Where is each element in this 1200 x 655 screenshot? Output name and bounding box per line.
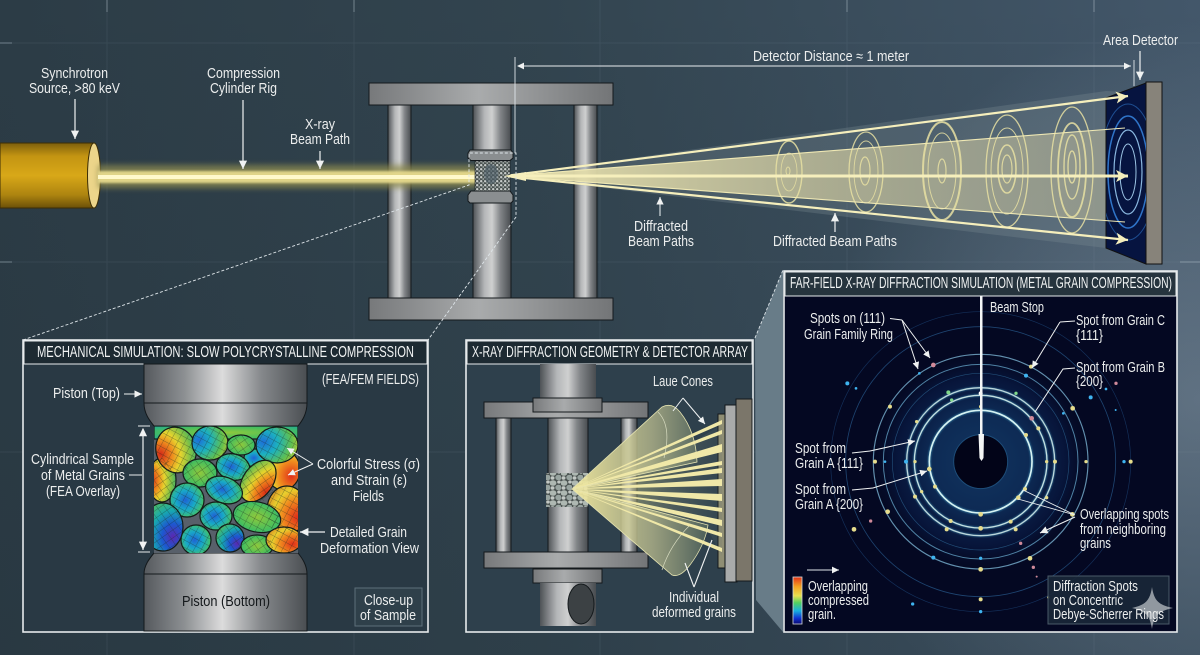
- label: spots on 111 ring: [804, 311, 930, 369]
- heading: mechanical simulation: [24, 341, 427, 364]
- label: stress and strain fields: Fields: [353, 489, 384, 505]
- diffracted rays fan: [572, 420, 722, 552]
- compression rig: [369, 83, 613, 320]
- label: overlapping spots: from neighboring: [1080, 522, 1166, 538]
- diffracted beams and rings: [505, 91, 1128, 250]
- label: individual deformed grains: deformed grains: [652, 605, 736, 621]
- label: synchrotron source: Synchrotron: [41, 66, 108, 82]
- callout: close-up of sample: [355, 588, 422, 626]
- heading: diffraction geometry: [467, 341, 752, 364]
- callout: debye-scherrer rings: Diffraction Spots: [1053, 579, 1138, 595]
- label: x-ray beam path: [290, 117, 350, 169]
- legend: colour bar: grain.: [808, 607, 836, 623]
- label: overlapping spots: [1018, 490, 1169, 552]
- detector array: [718, 399, 752, 582]
- label: diffracted beam paths right: Diffracted Beam Paths: [773, 234, 897, 250]
- diffraction spots: [845, 363, 1133, 613]
- callout: debye-scherrer rings: Debye-Scherrer Rings: [1053, 607, 1164, 623]
- heading: diffraction geometry: X-RAY DIFFRACTION GEOMETRY & DETECTOR ARRAY: [472, 344, 748, 361]
- label: synchrotron source: [29, 66, 120, 139]
- label: laue cones: Laue Cones: [653, 374, 713, 390]
- x-ray beam path: [98, 165, 478, 188]
- callout: debye-scherrer rings: [1048, 576, 1173, 629]
- label: area detector: [1103, 33, 1178, 80]
- label: spot from grain C: {111}: [1076, 328, 1103, 344]
- legend: colour bar: Overlapping: [808, 579, 868, 595]
- label: cylindrical sample: of Metal Grains: [41, 468, 125, 484]
- label: individual deformed grains: [652, 540, 736, 621]
- laue cones: [572, 405, 722, 576]
- callout: debye-scherrer rings: on Concentric: [1053, 593, 1123, 609]
- callout: close-up of sample: Close-up: [364, 593, 413, 609]
- label: compression cylinder rig: Cylinder Rig: [210, 81, 277, 97]
- piston bottom: Piston (Bottom): [182, 594, 270, 610]
- label: cylindrical sample: Cylindrical Sample: [31, 452, 134, 468]
- label: laue cones: [653, 374, 713, 424]
- label: diffracted beam paths left: Beam Paths: [628, 234, 694, 250]
- label: spot from grain B: [1035, 360, 1165, 412]
- area detector: [1100, 82, 1162, 264]
- label: spot from grain B: {200}: [1076, 374, 1103, 390]
- piston bottom: [144, 553, 307, 631]
- diffracted beam rays: [505, 96, 1128, 240]
- label: stress and strain fields: [287, 448, 420, 505]
- label: compression cylinder rig: [207, 66, 280, 169]
- inner diffracted cone edges: [505, 128, 1125, 222]
- label: diffracted beam paths left: [628, 197, 694, 250]
- x-ray source tube: [0, 143, 100, 208]
- label: cylindrical sample: [31, 426, 150, 552]
- label: cylindrical sample: (FEA Overlay): [46, 484, 120, 500]
- label: stress and strain fields: Colorful Stress (σ): [317, 457, 420, 473]
- label: detailed grain deformation: Deformation View: [320, 541, 419, 557]
- label: individual deformed grains: Individual: [669, 590, 719, 606]
- panel: far-field diffraction simulation: [784, 271, 1177, 632]
- label: piston top: Piston (Top): [53, 386, 120, 402]
- callout: close-up of sample: of Sample: [360, 608, 416, 624]
- label: overlapping spots: Overlapping spots: [1080, 507, 1169, 523]
- label: overlapping spots: grains: [1080, 536, 1111, 552]
- label: detailed grain deformation: Detailed Grain: [330, 525, 407, 541]
- small rig: [484, 364, 648, 626]
- heading: mechanical simulation: MECHANICAL SIMULATION: SLOW POLYCRYSTALLINE COMPRESSION: [37, 344, 414, 361]
- label: spots on 111 ring: Spots on (111): [810, 311, 885, 327]
- heading: far-field simulation: [785, 272, 1176, 296]
- label: spot from grain A 111: Grain A {111}: [795, 456, 863, 472]
- label: spot from grain B: Spot from Grain B: [1076, 360, 1165, 376]
- label: synchrotron source: Source, >80 keV: [29, 81, 120, 97]
- label: x-ray beam path: X-ray: [305, 117, 336, 133]
- label: spot from grain A 200: [795, 471, 927, 513]
- label: area detector: Area Detector: [1103, 33, 1178, 49]
- label: spot from grain A 111: Spot from: [795, 441, 846, 457]
- label: spot from grain A 200: Grain A {200}: [795, 497, 863, 513]
- panel: mechanical simulation: [23, 340, 428, 632]
- label: spot from grain C: Spot from Grain C: [1076, 313, 1165, 329]
- panel: x-ray diffraction geometry: [466, 340, 753, 632]
- piston top: [144, 364, 307, 426]
- label: x-ray beam path: Beam Path: [290, 132, 350, 148]
- label: detailed grain deformation: [300, 525, 419, 557]
- label: diffracted beam paths left: Diffracted: [634, 219, 688, 235]
- label: diffracted beam paths right: [773, 213, 897, 250]
- dashed zoom guide lines: [23, 153, 783, 340]
- chart: FEA grain field: [154, 426, 298, 553]
- label: spots on 111 ring: Grain Family Ring: [804, 327, 893, 343]
- zoom wedge to far-field panel: [755, 270, 783, 632]
- beam stop: Beam Stop: [990, 300, 1044, 316]
- label: FEA fields: (FEA/FEM FIELDS): [322, 372, 419, 388]
- label: stress and strain fields: and Strain (ε): [331, 473, 407, 489]
- legend: colour bar: compressed: [808, 593, 869, 609]
- detector distance dimension: Detector Distance ≈ 1 meter: [753, 49, 909, 65]
- label: spot from grain C: [1032, 313, 1165, 368]
- beam stop: [978, 296, 1044, 461]
- label: spot from grain A 200: Spot from: [795, 482, 846, 498]
- chart: debye-scherrer rings: [831, 312, 1133, 613]
- label: spot from grain A 111: [795, 441, 915, 472]
- label: compression cylinder rig: Compression: [207, 66, 280, 82]
- rig sample with collars: [468, 150, 526, 203]
- legend: colour bar: [793, 570, 869, 624]
